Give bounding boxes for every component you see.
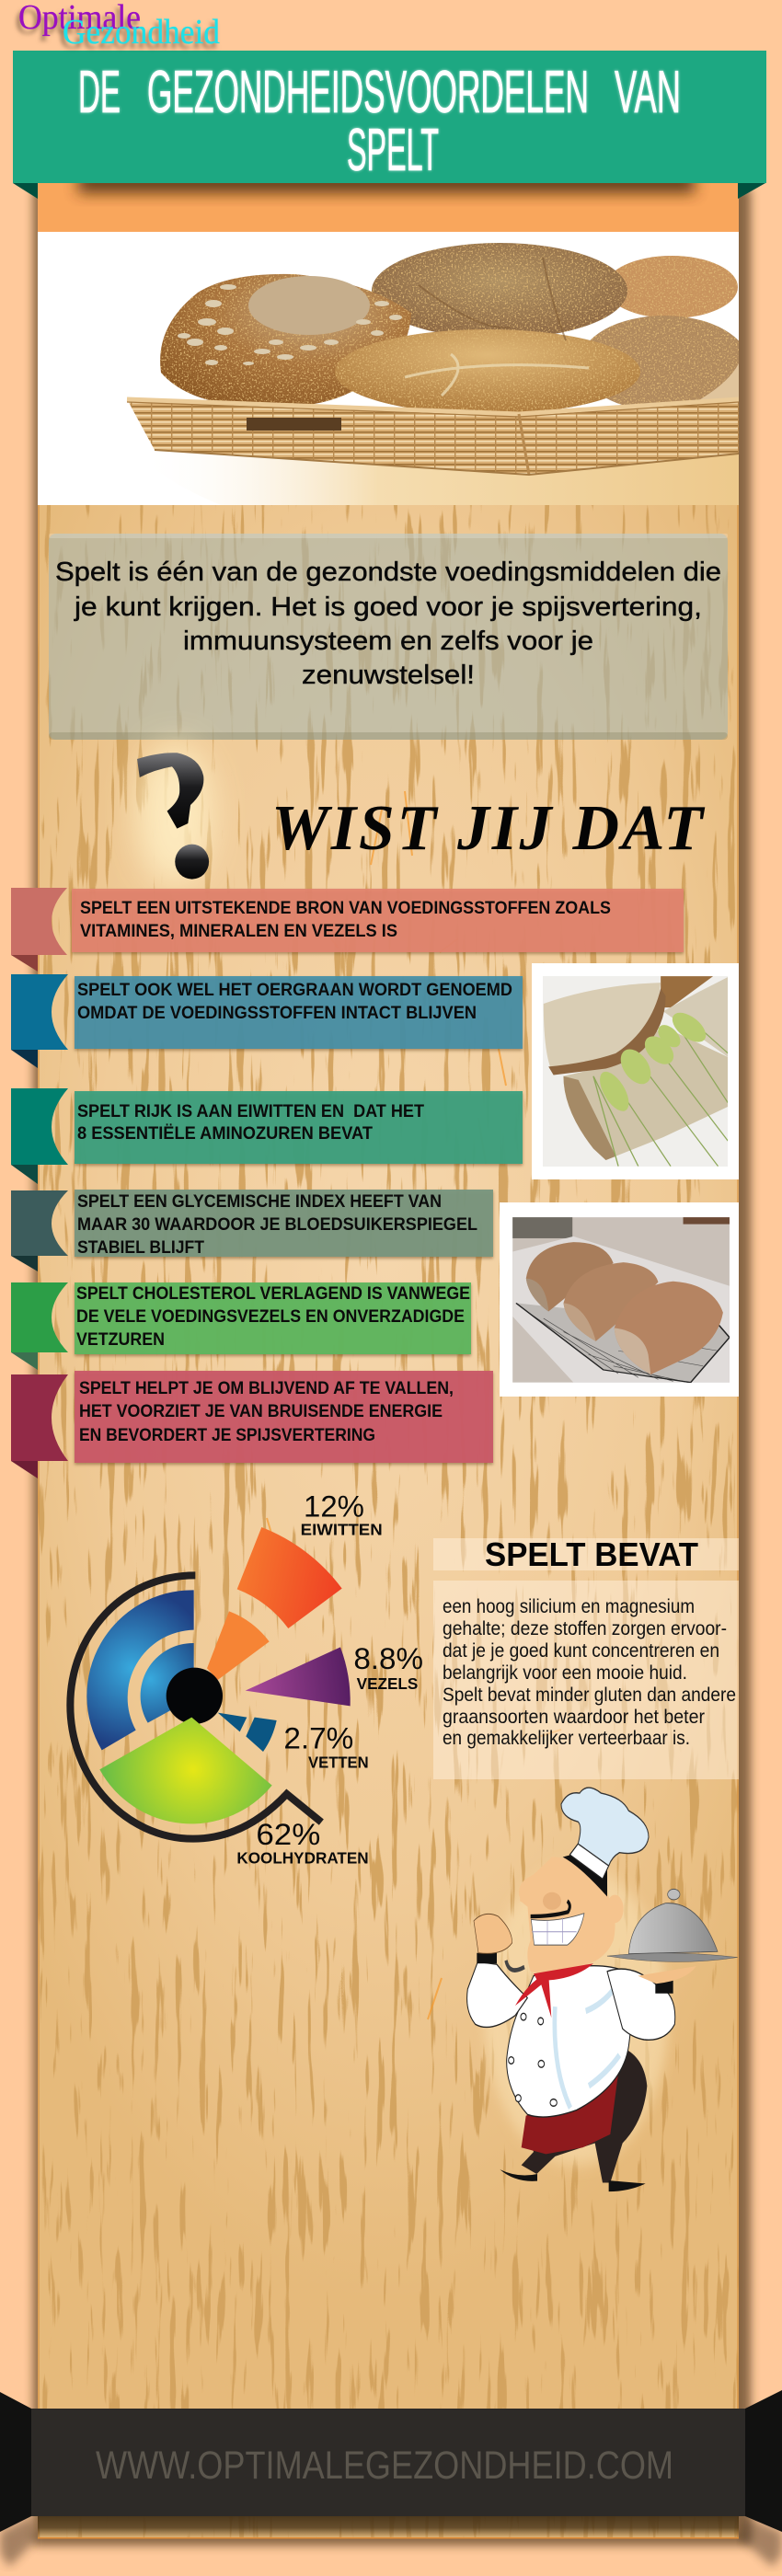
- body text: [443, 1596, 736, 1749]
- hero photo: bread basket: [38, 232, 749, 505]
- buttons: [509, 2013, 557, 2106]
- orange strip under banner: [38, 183, 739, 232]
- fact row 2: OMDAT DE VOEDINGSSTOFFEN INTACT BLIJVEN: [77, 1004, 477, 1023]
- fact row 5: DE VELE VOEDINGSVEZELS EN ONVERZADIGDE: [76, 1307, 465, 1327]
- orange sectors: [237, 1527, 342, 1628]
- smile and moustache: [531, 1914, 584, 1945]
- panel: spelt bevat: SPELT BEVAT: [485, 1535, 698, 1573]
- green sector: [99, 1718, 272, 1823]
- face: [520, 1857, 615, 1972]
- pie chart: spelt nutrients: [70, 1489, 423, 1868]
- fact row 5: VETZUREN: [76, 1330, 165, 1350]
- fact row 1: SPELT EEN UITSTEKENDE BRON VAN VOEDINGSSTOFFEN ZOALS: [80, 899, 611, 918]
- purple sector: [246, 1647, 351, 1706]
- chart labels: VETTEN: [308, 1754, 369, 1772]
- fact row 5: SPELT CHOLESTEROL VERLAGEND IS VANWEGE: [76, 1284, 470, 1304]
- wood panel background: [38, 505, 739, 2538]
- apron: [522, 2074, 618, 2154]
- fact row 2: [11, 974, 523, 1068]
- intro text: [55, 558, 721, 690]
- seeds and cuts on loaves: [178, 276, 402, 365]
- fact row 6: HET VOORZIET JE VAN BRUISENDE ENERGIE: [79, 1402, 443, 1421]
- chart labels: EIWITTEN: [301, 1521, 383, 1539]
- arms: [467, 1961, 527, 2027]
- illustration: chef with cloche: [467, 1788, 738, 2191]
- fact row 1: VITAMINES, MINERALEN EN VEZELS IS: [80, 922, 397, 941]
- heading: wist jij dat: WIST JIJ DAT: [271, 793, 706, 864]
- panel: spelt bevat: [433, 1535, 739, 1779]
- fact row 4: SPELT EEN GLYCEMISCHE INDEX HEEFT VAN: [77, 1192, 442, 1212]
- chart labels: VEZELS: [357, 1674, 418, 1693]
- fact row 5: [11, 1282, 471, 1370]
- table surface: [214, 454, 739, 505]
- fact row 4: MAAR 30 WAARDOOR JE BLOEDSUIKERSPIEGEL: [77, 1215, 477, 1235]
- body text: gehalte; deze stoffen zorgen ervoor-: [443, 1618, 727, 1639]
- fact row 4: [11, 1190, 493, 1271]
- fact row 3: [11, 1088, 523, 1184]
- icon: question mark: [136, 742, 213, 886]
- chart labels: 2.7%: [283, 1722, 353, 1755]
- chart labels: 8.8%: [353, 1642, 423, 1675]
- title banner: [13, 51, 766, 199]
- jacket: [507, 1966, 631, 2117]
- blue sectors: [86, 1590, 194, 1750]
- intro text: immuunsysteem en zelfs voor je: [183, 627, 593, 656]
- body text: Spelt bevat minder gluten dan andere: [443, 1685, 736, 1706]
- chart labels: 62%: [256, 1818, 320, 1851]
- wicker basket: [127, 399, 739, 475]
- logo: Gezondheid: [63, 13, 220, 52]
- fact row 1: [11, 888, 684, 972]
- fact row 6: SPELT HELPT JE OM BLIJVEND AF TE VALLEN,: [79, 1379, 454, 1398]
- fact row 6: EN BEVORDERT JE SPIJSVERTERING: [79, 1426, 375, 1445]
- intro box: [49, 534, 728, 740]
- cooling rack: [516, 1303, 730, 1383]
- photo: three loaves on a rack: [500, 1202, 739, 1397]
- chart labels: [236, 1489, 423, 1868]
- chart labels: 12%: [304, 1489, 364, 1523]
- footer ribbon: [0, 2390, 782, 2567]
- fact row 3: SPELT RIJK IS AAN EIWITTEN EN DAT HET: [77, 1102, 424, 1121]
- centre circle: [167, 1668, 223, 1724]
- fact row 6: [11, 1371, 493, 1478]
- hat: [569, 1844, 609, 1879]
- title text: [78, 58, 681, 183]
- fact row 3: 8 ESSENTIËLE AMINOZUREN BEVAT: [77, 1124, 373, 1144]
- small blue sectors: [218, 1713, 247, 1731]
- trousers and shoes: [522, 2046, 647, 2183]
- hand and fingers: [474, 1914, 512, 1953]
- cloche: [628, 1903, 718, 1954]
- body text: graansoorten waardoor het beter: [443, 1707, 705, 1728]
- title text: DE: [78, 58, 121, 125]
- body text: en gemakkelijker verteerbaar is.: [443, 1728, 690, 1749]
- intro text: zenuwstelsel!: [302, 661, 475, 690]
- body text: dat je je goed kunt concentreren en: [443, 1640, 719, 1662]
- intro text: je kunt krijgen. Het is goed voor je spijsvertering,: [74, 592, 702, 622]
- fact row 4: STABIEL BLIJFT: [77, 1238, 204, 1258]
- intro text: Spelt is één van de gezondste voedingsmiddelen die: [55, 558, 721, 587]
- body text: belangrijk voor een mooie huid.: [443, 1662, 687, 1684]
- outer arc with arrow: [70, 1575, 321, 1839]
- red neck scarf: [515, 1963, 593, 2018]
- body text: een hoog silicium en magnesium: [443, 1596, 695, 1617]
- footer url: WWW.OPTIMALEGEZONDHEID.COM: [96, 2444, 673, 2488]
- photo: bread slices with wheat: [532, 963, 739, 1179]
- bread loaves: [160, 243, 749, 414]
- fact row 2: SPELT OOK WEL HET OERGRAAN WORDT GENOEMD: [77, 981, 512, 1000]
- chart labels: KOOLHYDRATEN: [236, 1849, 369, 1868]
- loaves: [526, 1242, 614, 1312]
- title text: SPELT: [347, 116, 439, 183]
- title text: VAN: [615, 58, 681, 125]
- logo: [18, 0, 220, 52]
- lighter end of right loaf: [699, 363, 739, 399]
